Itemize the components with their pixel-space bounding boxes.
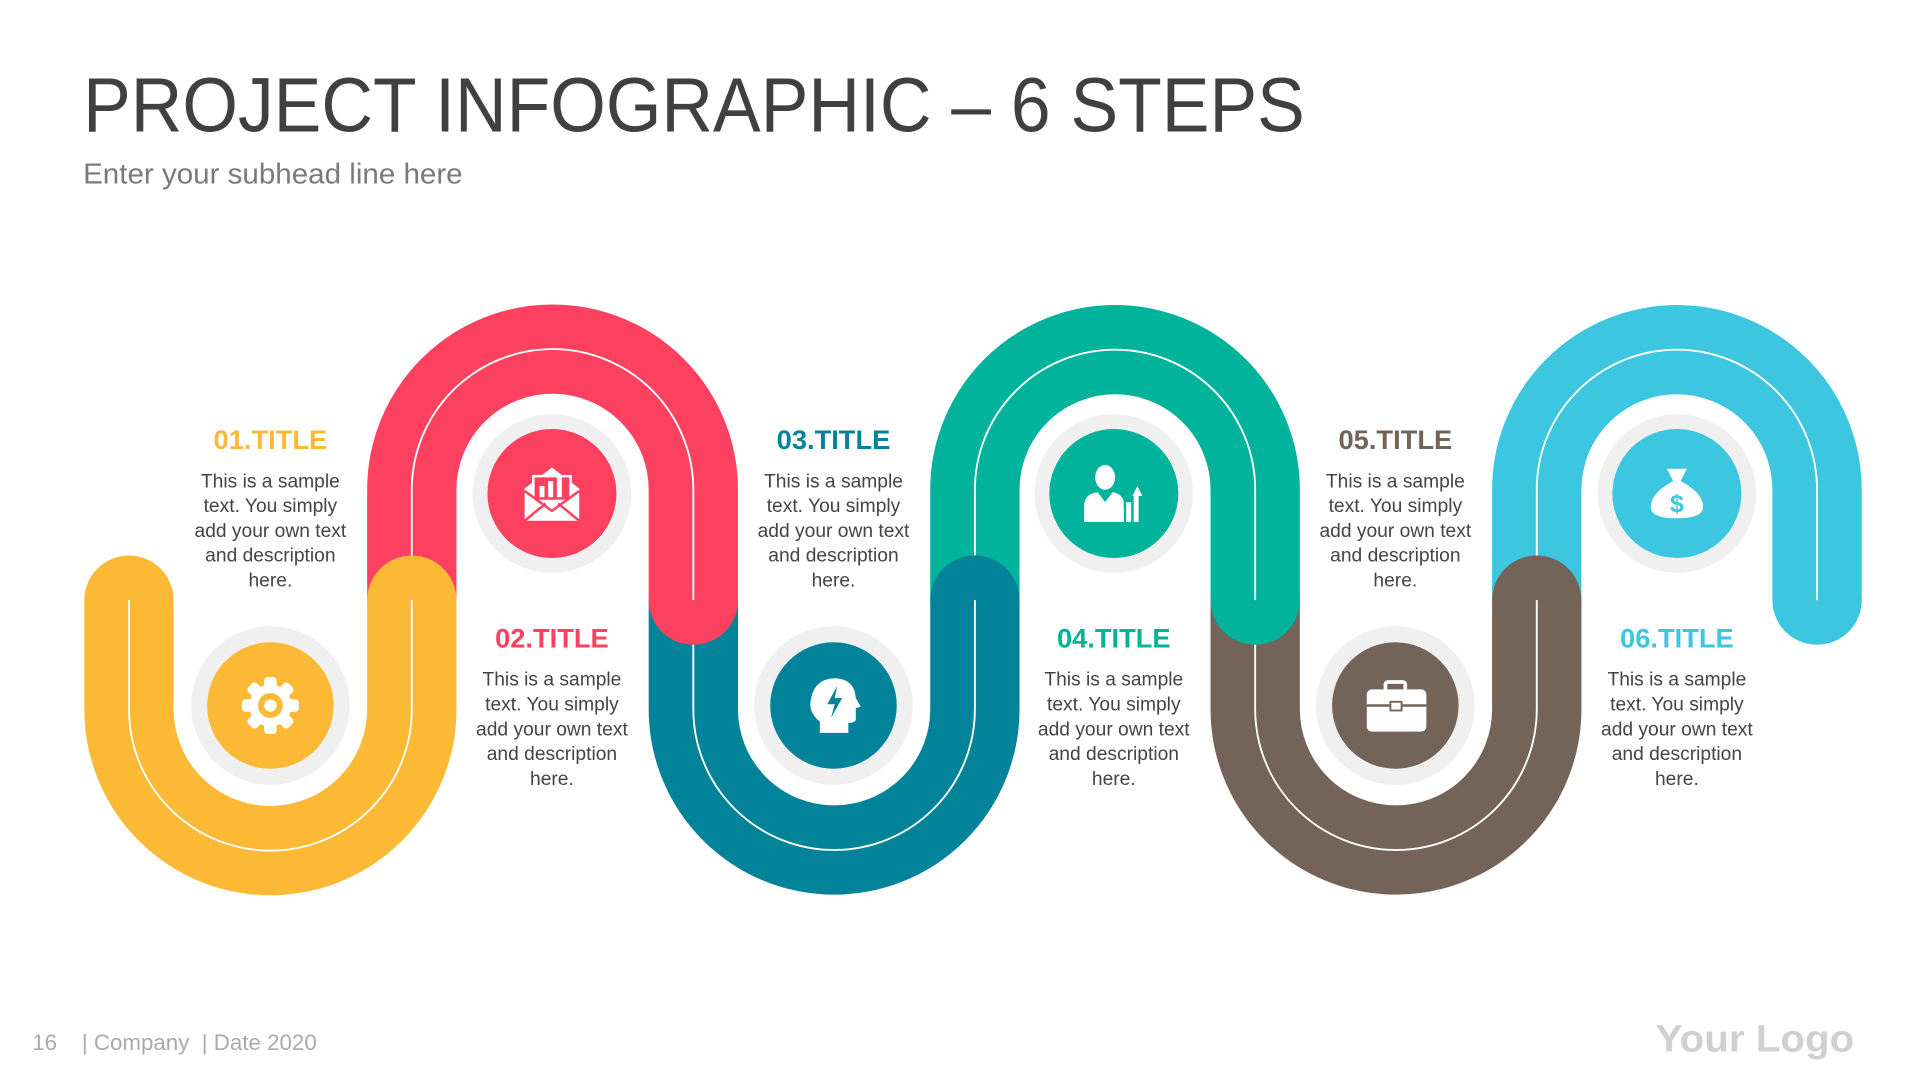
text block: step 03: here. [812,571,855,591]
text block: step 02 [476,622,628,790]
text block: step 04: here. [1092,769,1136,790]
text block: step 02: and description [487,744,617,765]
text block: step 03: text. You simply [767,496,901,517]
icon: gear [191,626,350,785]
text block: step 04: This is a sample [1044,670,1183,691]
text block: step 01: This is a sample [201,471,340,492]
icon: head with bolt [754,626,913,785]
text block: step 02: This is a sample [482,670,621,691]
text block: step 05: here. [1373,571,1417,591]
text block: step 04: text. You simply [1047,694,1181,715]
text block: step 02: 02.TITLE [495,622,609,653]
text block: step 02: text. You simply [485,694,619,715]
path segment: green arch [975,350,1300,645]
text block: step 06: This is a sample [1607,670,1746,691]
text block: step 06: 06.TITLE [1620,622,1734,653]
subhead: Enter your subhead line here [83,159,463,191]
text block: step 06 [1601,622,1753,790]
path segment: gold U [84,555,456,851]
text block: step 06: add your own text [1601,719,1753,740]
icon: money bag [1598,414,1756,573]
title: PROJECT INFOGRAPHIC – 6 STEPS [83,62,1305,148]
text block: step 01 [195,424,347,591]
text block: step 04 [1038,622,1190,790]
text block: step 01: and description [205,546,336,567]
text block: step 06: here. [1655,769,1699,790]
text block: step 05: and description [1330,546,1461,567]
text block: step 04: add your own text [1038,719,1190,740]
footer: 16 | Company | Date 2020 [32,1030,317,1055]
text block: step 06: text. You simply [1610,694,1744,715]
text block: step 03 [758,424,910,591]
text block: step 01: add your own text [195,521,347,542]
text block: step 04: 04.TITLE [1057,622,1171,653]
text block: step 06: and description [1612,744,1742,765]
icon: money bag: $ [1670,491,1684,518]
text block: step 01: text. You simply [204,496,338,517]
text block: step 02: add your own text [476,719,628,740]
text block: step 03: and description [768,546,899,567]
path segment: pink arch [412,349,738,645]
icon: briefcase [1316,626,1475,785]
text block: step 05 [1319,424,1472,591]
text block: step 03: This is a sample [764,471,903,492]
text block: step 05: text. You simply [1329,496,1463,517]
icon: businessman with chart [1034,414,1193,573]
text block: step 02: here. [530,769,574,790]
text block: step 03: add your own text [758,521,910,542]
text block: step 05: This is a sample [1326,471,1465,492]
path segment: brown U [1255,555,1581,850]
path segment: light blue arch [1537,350,1862,645]
text block: step 01: 01.TITLE [214,424,327,455]
logo: Your Logo [1656,1017,1854,1060]
text block: step 04: and description [1049,744,1179,765]
text block: step 05: 05.TITLE [1339,424,1452,455]
path segment: dark teal U [693,555,1020,850]
text block: step 05: add your own text [1319,521,1472,542]
icon: envelope with chart [473,414,631,573]
text block: step 01: here. [248,571,292,591]
text block: step 03: 03.TITLE [777,424,890,455]
